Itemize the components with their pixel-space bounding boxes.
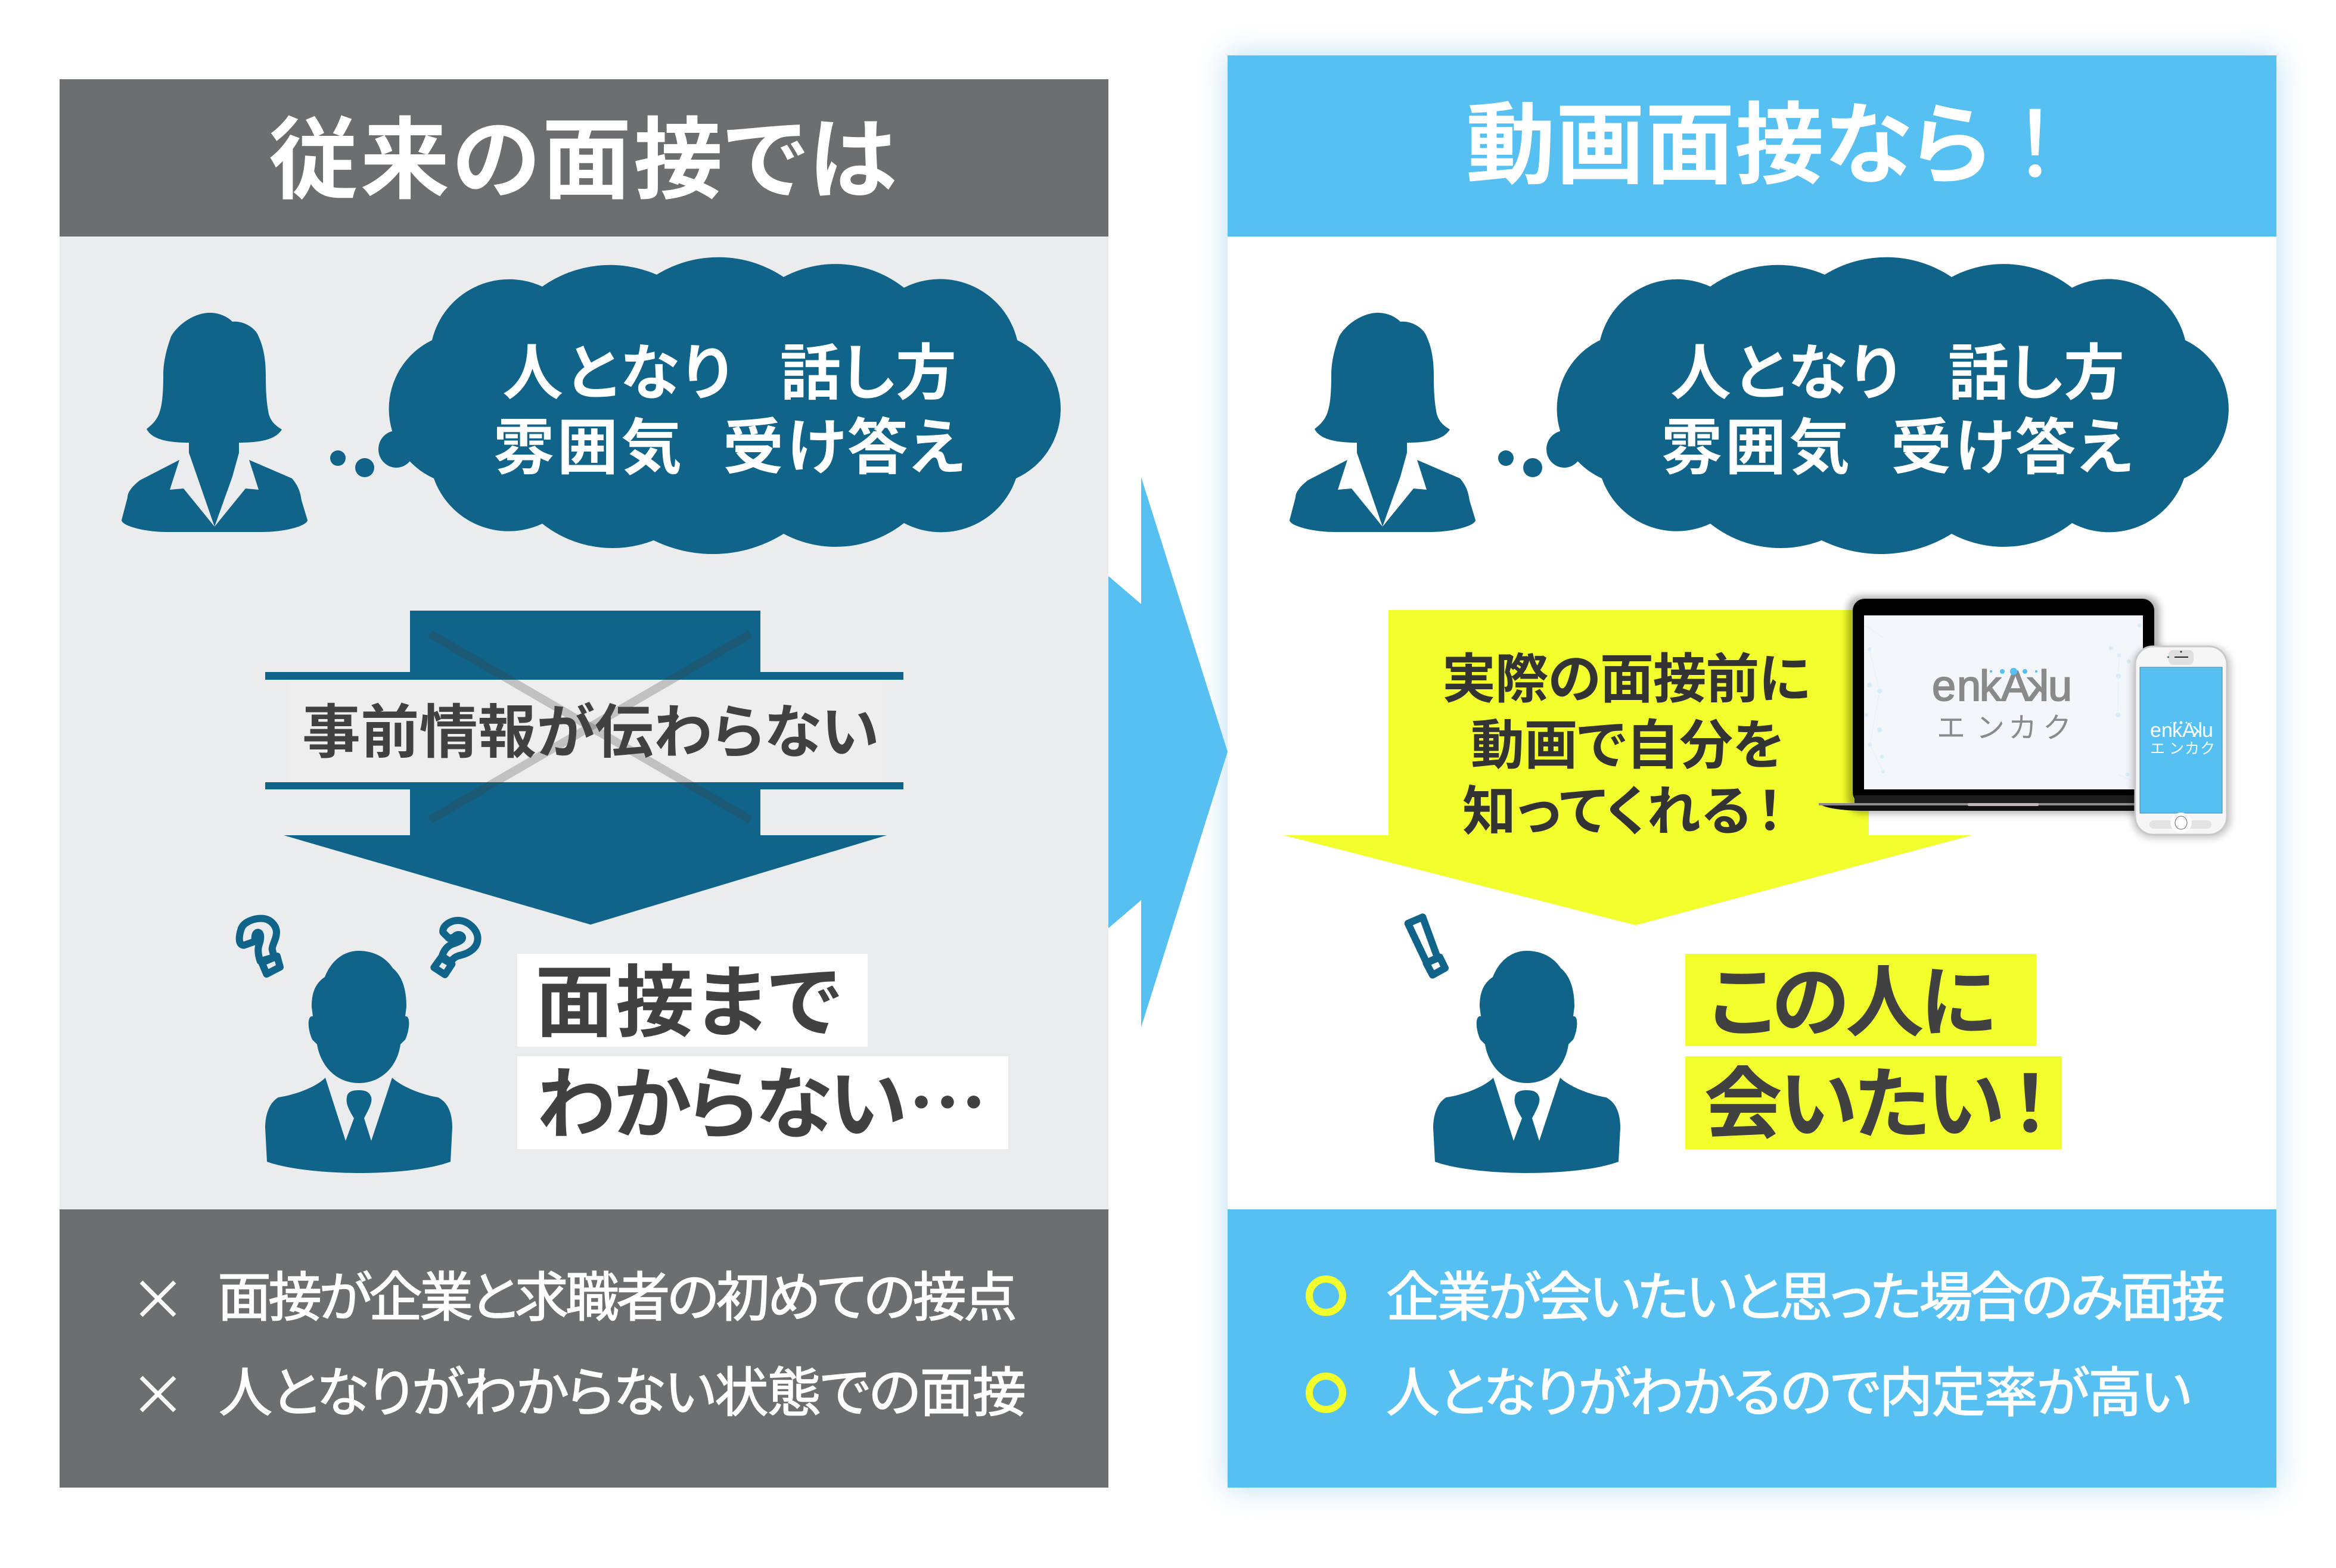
left cloud text: 人となり [502, 340, 731, 407]
phone logo katakana: エンカク [2150, 741, 2215, 757]
yellow arrow text: ！ [1743, 768, 1797, 845]
laptop logo katakana: エンカク [1937, 713, 2071, 744]
left panel header bar [60, 79, 1108, 237]
left cloud text: 話し方 [780, 340, 956, 407]
left thought cloud [378, 257, 1061, 554]
yellow down arrow [1284, 610, 1972, 925]
right result box line 2: 会いたい [1704, 1061, 2005, 1149]
right result box line 2 [1685, 1041, 2070, 1155]
left footer item 1: 面接が企業と求職者の初めての接点 [218, 1268, 1017, 1328]
right thought dots [1498, 450, 1542, 477]
left panel heading: 従来の面接では [269, 110, 896, 210]
right cloud text [1661, 340, 2133, 482]
right cloud text: 雰囲気 [1661, 414, 1850, 482]
left panel body [60, 237, 1108, 1209]
panel: video interview [1228, 55, 2276, 1488]
icon: confused man [265, 951, 452, 1173]
right footer item 2: 人となりがわかるので内定率が高い [1386, 1364, 2191, 1423]
phone body [2135, 646, 2227, 835]
left result box line 2: … [908, 1041, 987, 1155]
left arrow label band [288, 680, 882, 782]
right icon: woman interviewer [1290, 313, 1475, 532]
laptop logo dots [1990, 668, 2037, 675]
left cloud text [493, 340, 965, 482]
laptop lower bezel [1854, 795, 2141, 803]
icon: question marks [240, 919, 478, 975]
phone logo dots [2170, 721, 2192, 724]
right cloud text: 受け答え [1891, 414, 2133, 482]
right thought cloud [1546, 257, 2229, 554]
laptop base [1819, 803, 2139, 811]
laptop lid [1853, 599, 2154, 804]
left result box line 2 [517, 1041, 1008, 1155]
right panel heading: 動画面接なら [1466, 95, 1990, 195]
left arrow label: 事前情報が伝わらない [302, 699, 879, 765]
phone screen [2140, 667, 2222, 813]
laptop logo: k [2027, 662, 2049, 710]
right result box line 2: ！ [1991, 1041, 2070, 1155]
yellow arrow text: 知ってくれる [1462, 782, 1751, 842]
laptop logo [1932, 662, 2072, 710]
right panel heading [1466, 73, 2080, 203]
left result box line 1: 面接まで [535, 959, 840, 1047]
right panel heading: ！ [1990, 73, 2080, 203]
left cloud text: 受け答え [723, 414, 965, 482]
left result box line 2: わからない [536, 1061, 907, 1149]
right panel body [1228, 237, 2276, 1209]
device: smartphone [2132, 646, 2231, 838]
laptop hinge notch [1968, 803, 2039, 806]
left footer bar [60, 1209, 1108, 1488]
right footer item 1: 企業が会いたいと思った場合のみ面接 [1386, 1268, 2225, 1328]
right cloud text: 話し方 [1948, 340, 2124, 407]
device: laptop [1819, 596, 2160, 814]
phone earpiece [2167, 650, 2194, 665]
icon: enlightened man [1433, 951, 1620, 1173]
right footer bar [1228, 1209, 2276, 1488]
laptop screen network pattern [1865, 624, 2141, 780]
laptop logo: enkA [1932, 662, 2030, 710]
yellow arrow text: 動画で自分を [1471, 716, 1784, 776]
left icon: woman interviewer [122, 313, 307, 532]
yellow arrow text: 実際の面接前に [1442, 650, 1810, 710]
laptop shadow [1847, 596, 2160, 814]
right panel header bar [1228, 55, 2276, 237]
yellow arrow text [1442, 650, 1810, 845]
right cloud text: 人となり [1670, 340, 1899, 407]
phone logo: enkA [2150, 719, 2196, 742]
right result box line 1: この人に [1709, 959, 1996, 1047]
phone logo: u [2202, 719, 2213, 742]
left footer item 2: 人となりがわからない状態での面接 [219, 1364, 1026, 1423]
cross mark over arrow [430, 634, 750, 820]
left arrow band lines [265, 672, 903, 789]
phone logo: k [2192, 719, 2203, 742]
panel: conventional interview [60, 79, 1108, 1488]
laptop logo: u [2048, 662, 2072, 710]
phone home button [2149, 813, 2211, 833]
left down arrow [284, 611, 887, 925]
laptop screen [1864, 615, 2143, 789]
phone shadow [2132, 646, 2231, 838]
left thought dots [330, 450, 374, 477]
icon: exclamation mark [1408, 917, 1445, 975]
left cloud text: 雰囲気 [493, 414, 682, 482]
background glow of right panel [1228, 55, 2276, 1488]
center arrow [1108, 477, 1228, 1027]
